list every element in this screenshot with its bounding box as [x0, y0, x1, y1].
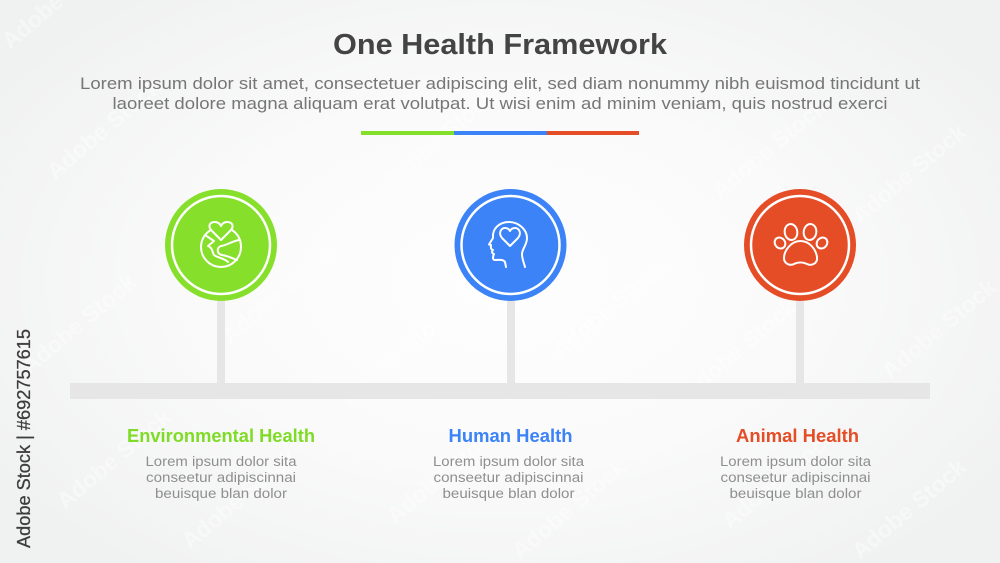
icon: earth with heart [201, 222, 241, 267]
label: human health: Lorem ipsum dolor sita [433, 454, 585, 469]
text: Adobe Stock [42, 73, 166, 184]
node: environmental health [165, 189, 277, 301]
label: environmental health: conseetur adipiscinnai [146, 470, 296, 485]
timeline bar with stems [70, 298, 930, 399]
icon: head with heart [489, 222, 527, 267]
text: Adobe Stock [847, 118, 971, 229]
label: environmental health: beuisque blan dolor [155, 486, 288, 501]
stock id label: Adobe Stock | #692757615 [13, 329, 34, 548]
intro text block: laoreet dolore magna aliquam erat volutpat. Ut wisi enim ad minim veniam, quis nostrud exerci [112, 94, 888, 113]
label: environmental health: Environmental Health [127, 426, 315, 446]
label: animal health: beuisque blan dolor [730, 486, 862, 501]
label: human health [433, 426, 585, 501]
text: Adobe Stock [377, 83, 501, 194]
label: animal health [720, 426, 872, 501]
label: environmental health: Lorem ipsum dolor sita [146, 454, 297, 469]
text: Adobe Stock [382, 418, 506, 529]
node: human health [454, 189, 566, 301]
text: Adobe Stock [177, 443, 301, 554]
label: human health: beuisque blan dolor [442, 486, 575, 501]
text: Adobe Stock [717, 423, 841, 534]
label: environmental health [127, 426, 315, 501]
tricolor divider [361, 131, 639, 135]
text: Adobe Stock [52, 403, 176, 514]
text: Adobe Stock [17, 268, 141, 379]
label: human health: Human Health [448, 426, 572, 446]
text: Adobe Stock [877, 273, 1000, 384]
node: animal health [744, 189, 856, 301]
label: animal health: Animal Health [736, 426, 859, 446]
intro text block [80, 74, 920, 113]
intro text block: Lorem ipsum dolor sit amet, consectetuer adipiscing elit, sed diam nonummy nibh euismod tincidunt ut [80, 74, 920, 93]
text: Adobe Stock [217, 238, 341, 349]
label: human health: conseetur adipiscinnai [434, 470, 584, 485]
text: Adobe Stock [547, 253, 671, 364]
text: Adobe Stock [507, 453, 631, 563]
icon: paw print [772, 223, 830, 265]
text: Adobe Stock [677, 293, 801, 404]
title: One Health Framework [333, 29, 668, 61]
text: Adobe Stock [707, 93, 831, 204]
text: Adobe Stock [847, 453, 971, 563]
text: Adobe Stock [337, 298, 461, 409]
label: animal health: Lorem ipsum dolor sita [720, 454, 872, 469]
label: animal health: conseetur adipiscinnai [720, 470, 870, 485]
